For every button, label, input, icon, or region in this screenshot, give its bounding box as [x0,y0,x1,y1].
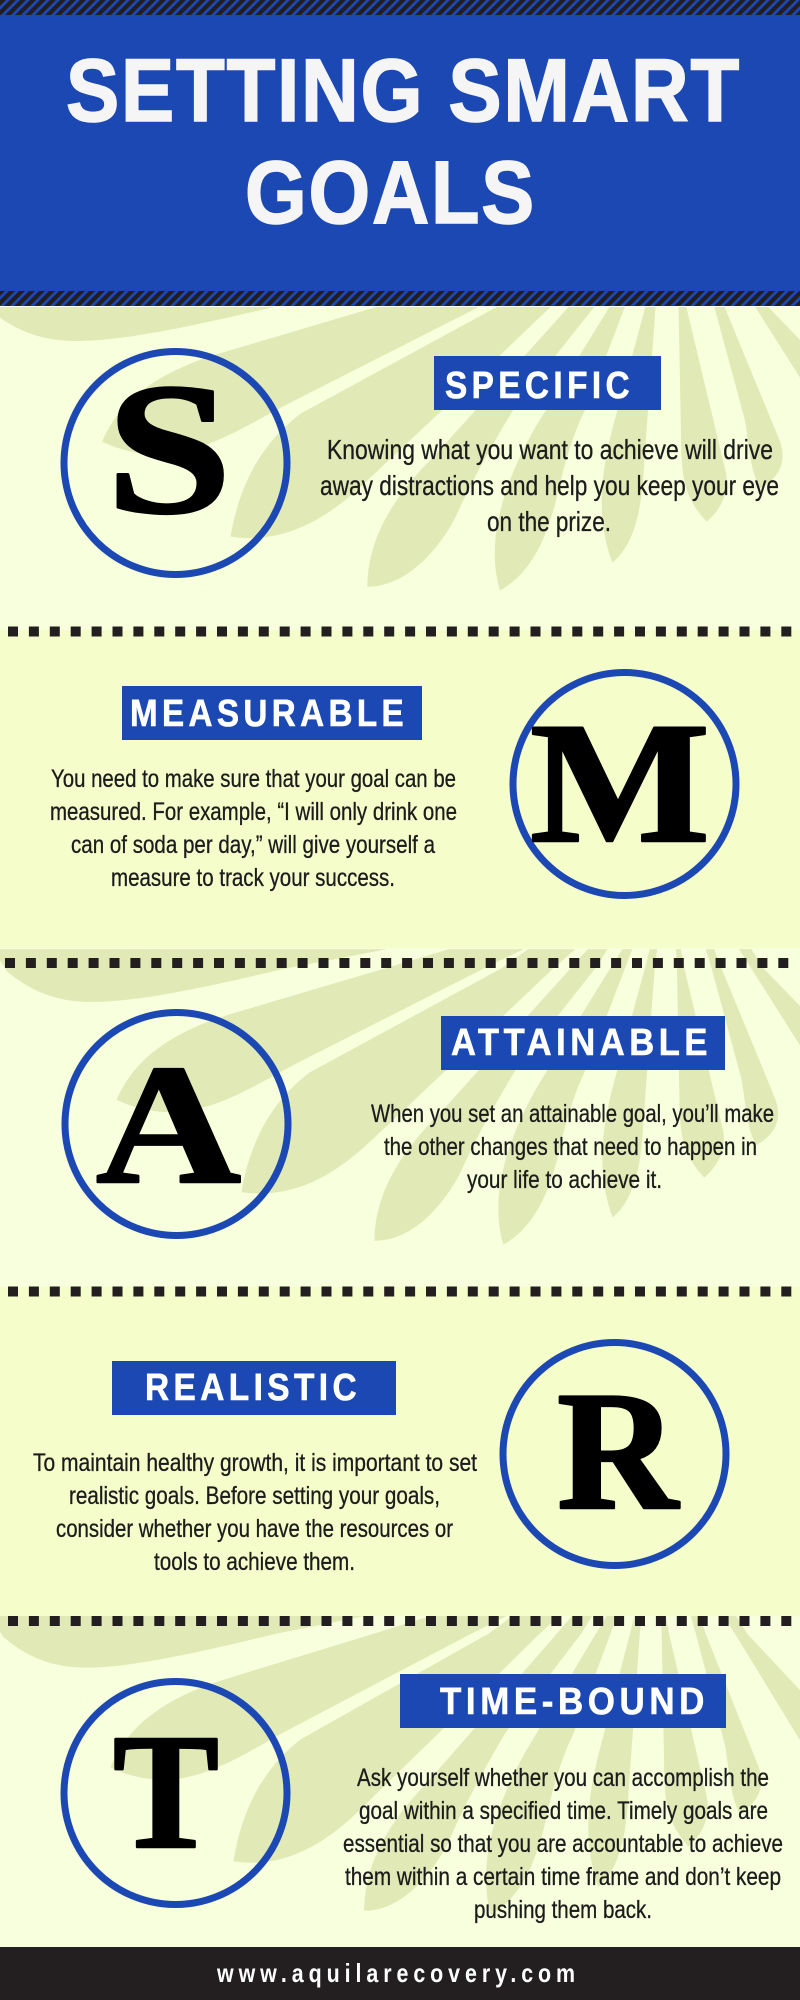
letter circle: A [65,1012,288,1236]
heading: specific: SPECIFIC [445,365,634,407]
text: measurable: measured. For example, “I will only drink one [50,798,457,826]
letter circle: R: R [557,1357,680,1545]
website url: www.aquilarecovery.com [216,1958,580,1988]
heading: attainable: ATTAINABLE [451,1022,712,1064]
title: SETTING SMART [66,40,741,140]
text: realistic: To maintain healthy growth, it is important to set [33,1449,477,1477]
heading: measurable: MEASURABLE [130,693,408,735]
text: measurable: measure to track your success. [111,864,395,892]
panel: measurable [50,672,736,896]
header banner [0,0,800,306]
text: realistic [33,1449,477,1576]
letter circle: M: M [530,688,710,879]
heading: time-bound: TIME-BOUND [440,1681,709,1723]
text: attainable [371,1100,774,1194]
text: time-bound [343,1764,783,1924]
text: measurable: can of soda per day,” will give yourself a [71,831,435,859]
footer bar [0,1947,800,2000]
letter circle: T [64,1682,287,1904]
text: time-bound: pushing them back. [474,1896,652,1924]
text: specific: on the prize. [487,506,611,537]
background: petals behind specific section [0,287,800,591]
text: attainable: your life to achieve it. [467,1166,662,1194]
letter circle: S: S [106,344,232,553]
heading: time-bound [400,1674,726,1728]
text: realistic: realistic goals. Before setting your goals, [69,1482,440,1510]
panel: attainable [65,1012,774,1236]
panel: realistic [33,1342,726,1576]
text: measurable: You need to make sure that your goal can be [51,765,456,793]
letter circle: T: T [113,1700,219,1883]
background: petals behind time-bound section [0,1614,800,1915]
text: specific [320,434,779,537]
text: realistic: tools to achieve them. [154,1548,355,1576]
letter circle: R [503,1342,726,1566]
heading: realistic: REALISTIC [145,1367,361,1409]
heading: realistic [112,1361,396,1415]
panel: time-bound [64,1674,783,1924]
title [66,40,741,242]
letter circle: M [513,672,736,896]
letter circle: A: A [96,1030,241,1219]
text: measurable [50,765,457,892]
panel: specific [64,344,779,574]
background: petals behind attainable section [0,949,800,1245]
title: GOALS [245,142,536,242]
letter circle: S [64,344,287,574]
text: realistic: consider whether you have the resources or [56,1515,453,1543]
